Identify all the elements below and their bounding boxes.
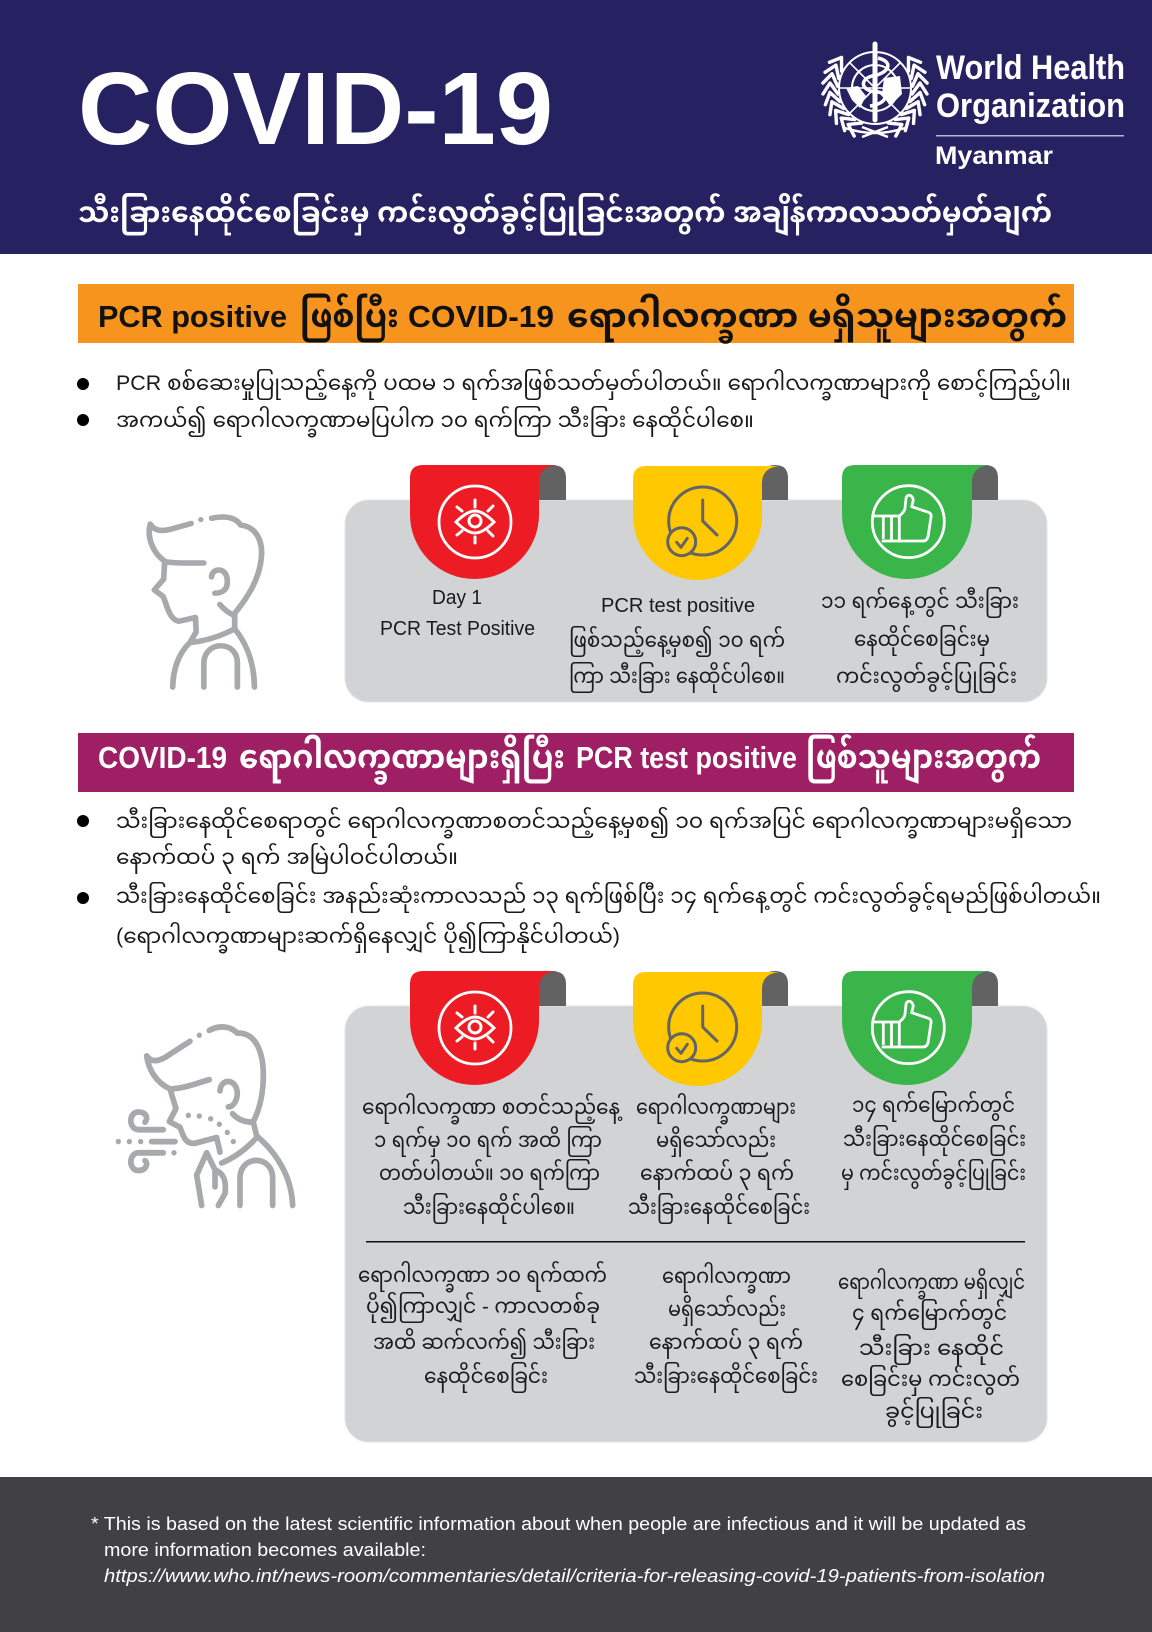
- footer: more information becomes available:: [104, 1540, 426, 1560]
- label: column 3: နေထိုင်စေခြင်းမှ: [854, 625, 990, 656]
- text block: section 1 bullets: အကယ်၍ ရောဂါလက္ခဏာမပြပါက ၁၀ ရက်ကြာ သီးခြား နေထိုင်ပါစေ။: [116, 404, 754, 438]
- label: lower column 3: သီးခြား နေထိုင်: [859, 1334, 1004, 1365]
- ribbon: yellow clock: [633, 465, 788, 580]
- label: lower column 2: ရောဂါလက္ခဏာ: [662, 1263, 791, 1292]
- label: upper column 3: သီးခြားနေထိုင်စေခြင်း: [843, 1125, 1026, 1156]
- label: lower column 3: ၄ ရက်မြောက်တွင်: [852, 1299, 1007, 1329]
- label: lower column 1: ရောဂါလက္ခဏာ ၁၀ ရက်ထက်: [358, 1261, 607, 1291]
- text block: section 2 bullets: [77, 805, 1101, 954]
- text block: section 2 bullets: သီးခြားနေထိုင်စေရာတွင် ရောဂါလက္ခဏာစတင်သည့်နေ့မှစ၍ ၁၀ ရက်အပြင် ရောဂါလက္ခဏာများမရှိသော: [116, 805, 1072, 839]
- logo text: World Health Organization: [935, 49, 1125, 170]
- label: lower column 1: အထိ ဆက်လက်၍ သီးခြား: [373, 1328, 595, 1358]
- label: upper column 2: မရှိသော်လည်း: [656, 1126, 776, 1157]
- label: lower column 1: နေထိုင်စေခြင်း: [424, 1362, 548, 1393]
- label: upper column 1: [362, 1093, 623, 1224]
- label: lower column 3: စေခြင်းမှ ကင်းလွတ်: [841, 1365, 1020, 1396]
- heading: section 1: PCR positive: [98, 299, 287, 334]
- label: upper column 3: [841, 1091, 1026, 1190]
- label: column 2: PCR test positive: [601, 594, 755, 617]
- text block: section 2 bullets: နောက်ထပ် ၃ ရက် အမြဲပါဝင်ပါတယ်။: [116, 841, 458, 874]
- title: COVID-19: [78, 51, 553, 166]
- heading: section 2: [78, 733, 1074, 792]
- label: lower column 3: [838, 1268, 1025, 1427]
- label: upper column 1: သီးခြားနေထိုင်ပါစေ။: [403, 1193, 575, 1224]
- label: column 3: ကင်းလွတ်ခွင့်ပြုခြင်း: [836, 662, 1017, 692]
- label: upper column 2: သီးခြားနေထိုင်စေခြင်း: [628, 1193, 810, 1224]
- label: column 2: [569, 594, 785, 693]
- label: upper column 2: နောက်ထပ် ၃ ရက်: [640, 1159, 794, 1189]
- heading: section 1: [78, 284, 1074, 343]
- label: upper column 2: ရောဂါလက္ခဏာများ: [636, 1094, 796, 1123]
- logo text: World Health Organization: Myanmar: [935, 142, 1053, 170]
- label: lower column 2: သီးခြားနေထိုင်စေခြင်း: [634, 1362, 818, 1393]
- ribbon: red eye: [410, 971, 566, 1085]
- icon: person coughing: [116, 1027, 293, 1206]
- heading: section 1: ရောဂါလက္ခဏာ မရှိသူများအတွက်: [567, 293, 1067, 343]
- label: lower column 1: [358, 1261, 607, 1393]
- panel: section 2 timeline: [345, 971, 1047, 1442]
- label: column 1: PCR Test Positive: [380, 617, 535, 640]
- ribbon: yellow clock: [633, 971, 788, 1086]
- logo text: World Health Organization: Organization: [936, 87, 1125, 125]
- icon: WHO emblem: [823, 44, 927, 137]
- heading: section 2: PCR test positive: [576, 740, 797, 775]
- label: lower column 3: ခွင့်ပြုခြင်း: [885, 1397, 983, 1427]
- icon: person profile: [149, 517, 262, 687]
- label: upper column 2: [628, 1094, 810, 1224]
- label: upper column 1: ၁ ရက်မှ ၁၀ ရက် အထိ ကြာ: [374, 1126, 602, 1157]
- subtitle: သီးခြားနေထိုင်စေခြင်းမှ ကင်းလွတ်ခွင့်ပြုခြင်းအတွက် အချိန်ကာလသတ်မှတ်ချက်: [78, 193, 1052, 236]
- text block: section 2 bullets: သီးခြားနေထိုင်စေခြင်း အနည်းဆုံးကာလသည် ၁၃ ရက်ဖြစ်ပြီး ၁၄ ရက်နေ့တွင် ကင်းလွတ်ခွင့်ရမည်ဖြစ်ပါတယ်။: [116, 880, 1101, 913]
- label: lower column 2: နောက်ထပ် ၃ ရက်: [649, 1328, 803, 1358]
- ribbon: green thumbs up: [842, 971, 998, 1085]
- heading: section 2: COVID-19: [98, 740, 227, 775]
- label: lower column 1: ပို၍ကြာလျှင် - ကာလတစ်ခု: [366, 1292, 600, 1323]
- label: upper column 3: ၁၄ ရက်မြောက်တွင်: [852, 1091, 1015, 1121]
- label: lower column 2: [634, 1263, 818, 1393]
- footer: https://www.who.int/news-room/commentaries/detail/criteria-for-releasing-covid-19-patients-from-isolation: [104, 1566, 1045, 1586]
- label: column 2: ဖြစ်သည့်နေ့မှစ၍ ၁၀ ရက်: [569, 626, 785, 657]
- label: column 3: ၁၁ ရက်နေ့တွင် သီးခြား: [821, 587, 1019, 617]
- panel: section 1 timeline: [345, 465, 1047, 702]
- footer: [0, 1477, 1152, 1632]
- heading: section 1: COVID-19: [408, 299, 554, 334]
- label: upper column 1: တတ်ပါတယ်။ ၁၀ ရက်ကြာ: [379, 1159, 600, 1189]
- heading: section 2: ရောဂါလက္ခဏာများရှိပြီး: [239, 735, 565, 784]
- heading: section 1: ဖြစ်ပြီး: [300, 293, 399, 342]
- ribbon: red eye: [410, 465, 566, 579]
- text block: section 1 bullets: [77, 367, 1071, 438]
- label: column 1: Day 1: [432, 586, 482, 609]
- ribbon: green thumbs up: [842, 465, 998, 579]
- label: lower column 3: ရောဂါလက္ခဏာ မရှိလျှင်: [838, 1268, 1025, 1299]
- label: column 2: ကြာ သီးခြား နေထိုင်ပါစေ။: [569, 662, 785, 693]
- label: column 1: [380, 586, 535, 640]
- header band: [0, 0, 1152, 254]
- text block: section 1 bullets: PCR စစ်ဆေးမှုပြုသည့်နေ့ကို ပထမ ၁ ရက်အဖြစ်သတ်မှတ်ပါတယ်။ ရောဂါလက္ခဏာများကို စောင့်ကြည့်ပါ။: [116, 367, 1071, 401]
- footer: * This is based on the latest scientific information about when people are infectious and it will be updated as: [91, 1514, 1026, 1534]
- text block: section 2 bullets: (ရောဂါလက္ခဏာများဆက်ရှိနေလျှင် ပို၍ကြာနိုင်ပါတယ်): [116, 920, 620, 954]
- logo text: World Health Organization: World Health: [936, 49, 1125, 87]
- label: column 3: [821, 587, 1019, 692]
- label: upper column 1: ရောဂါလက္ခဏာ စတင်သည့်နေ့: [362, 1093, 623, 1123]
- label: upper column 3: မှ ကင်းလွတ်ခွင့်ပြုခြင်း: [841, 1159, 1026, 1190]
- heading: section 2: ဖြစ်သူများအတွက်: [806, 734, 1041, 784]
- label: lower column 2: မရှိသော်လည်း: [668, 1295, 786, 1326]
